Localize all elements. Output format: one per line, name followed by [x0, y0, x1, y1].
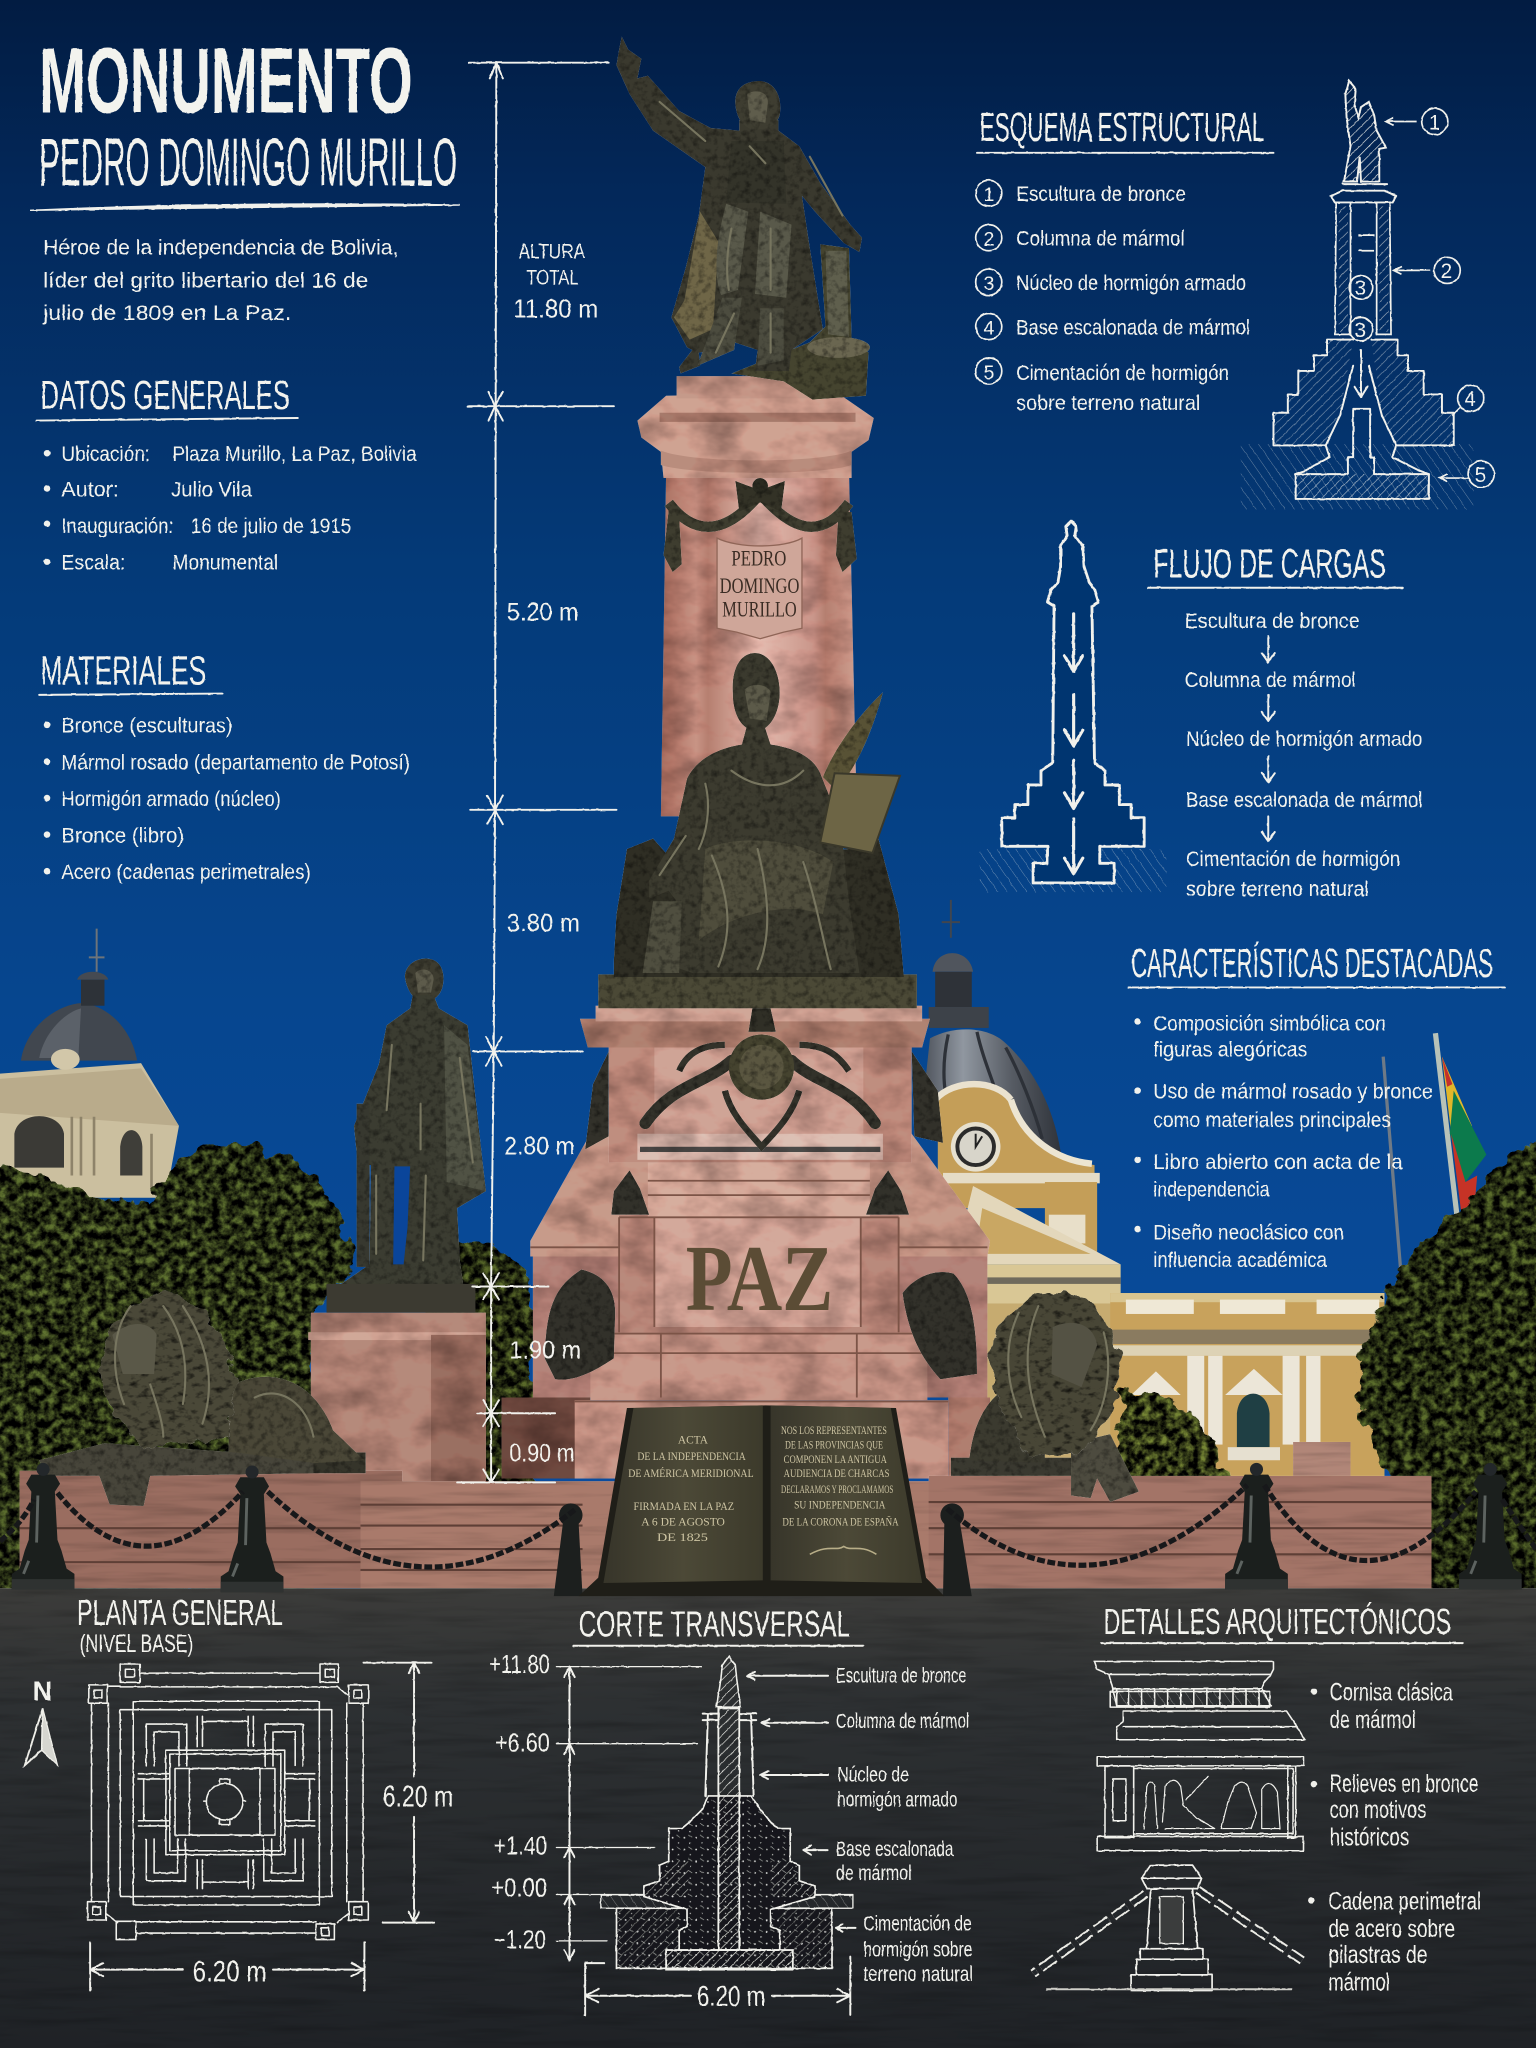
diagram: cross section: [601, 1656, 853, 1970]
open stone book: DE AMÉRICA MERIDIONAL: [628, 1466, 754, 1480]
plaza paving: [0, 1588, 1536, 2048]
left statue plinth top: [327, 1284, 475, 1313]
monument: pedestal block: [580, 1006, 930, 1162]
detail captions: con motivos: [1330, 1797, 1426, 1824]
detail captions: mármol: [1328, 1970, 1390, 1997]
diagram: load flow silhouette: [980, 521, 1166, 892]
dimension labels: 3.80 m: [507, 910, 580, 937]
title block: [30, 28, 460, 210]
open stone book: DE LA INDEPENDENCIA: [637, 1450, 746, 1463]
panel: materiales: MATERIALES: [40, 647, 206, 693]
dimension labels: 2.80 m: [504, 1134, 575, 1161]
bronze open tablet held by figure: [820, 773, 900, 853]
panel: flujo de cargas: Base escalonada de mármol: [1186, 787, 1422, 812]
panel: caracteristicas destacadas: independencia: [1153, 1176, 1270, 1201]
section labels and arrows: hormigón sobre: [863, 1939, 972, 1962]
open stone book: A 6 DE AGOSTO: [641, 1516, 725, 1529]
panel: planta general heading: (NIVEL BASE): [80, 1631, 193, 1658]
panel: flujo de cargas: Cimentación de hormigón: [1186, 846, 1400, 871]
dimension labels: 11.80 m: [513, 293, 598, 323]
panel: materiales: Bronce (libro): [61, 822, 184, 847]
panel: caracteristicas destacadas: Uso de mármol rosado y bronce: [1153, 1078, 1433, 1103]
monument: lower base: [502, 1134, 990, 1479]
open stone book: COMPONEN LA ANTIGUA: [784, 1453, 887, 1466]
level marks: +11.80: [489, 1649, 550, 1679]
panel: caracteristicas destacadas: Diseño neoclásico con: [1153, 1220, 1344, 1245]
panel: datos generales: Plaza Murillo, La Paz, Bolivia: [172, 441, 417, 466]
stairs and lion platforms: [20, 1442, 1432, 1591]
panel: flujo de cargas: FLUJO DE CARGAS: [1153, 540, 1386, 586]
panel: datos generales: Inauguración:: [61, 513, 174, 538]
thin flag pole: [1383, 1057, 1403, 1296]
detail captions: Cornisa clásica: [1330, 1680, 1453, 1707]
panel: caracteristicas destacadas: Libro abierto con acta de la: [1153, 1149, 1403, 1174]
panel: caracteristicas destacadas: Composición simbólica con: [1153, 1011, 1386, 1036]
open stone book: SU INDEPENDENCIA: [794, 1499, 886, 1512]
left tower building: [0, 929, 179, 1198]
panel: esquema estructural legend: Escultura de bronce: [1016, 181, 1186, 206]
diagram: structural elevation: 4: [1464, 388, 1476, 411]
panel: esquema estructural legend: Cimentación de hormigón: [1016, 360, 1229, 385]
detail captions: de acero sobre: [1328, 1916, 1455, 1943]
title block: MONUMENTO: [39, 28, 413, 132]
panel: esquema estructural legend: Núcleo de hormigón armado: [1016, 270, 1246, 295]
panel: esquema estructural legend: Base escalonada de mármol: [1016, 314, 1250, 339]
icon: north arrow: [25, 1676, 57, 1765]
intro text: Héroe de la independencia de Bolivia,: [43, 235, 398, 260]
left lion: [39, 1293, 366, 1506]
panel: esquema estructural legend: [976, 104, 1273, 415]
panel: esquema estructural legend: 2: [984, 229, 994, 251]
main facade with columns: [1110, 1293, 1384, 1479]
section labels and arrows: de mármol: [836, 1862, 912, 1885]
diagram: structural elevation: 1: [1429, 111, 1441, 134]
open stone book: NOS LOS REPRESENTANTES: [781, 1424, 887, 1437]
diagram: floor plan: [88, 1664, 368, 1940]
column capital: [637, 376, 874, 478]
open stone book: [579, 1405, 944, 1596]
panel: flujo de cargas: Escultura de bronce: [1185, 608, 1360, 633]
panel: datos generales: Julio Vila: [171, 476, 252, 501]
section width dimension: [585, 1957, 850, 2015]
panel: esquema estructural legend: ESQUEMA ESTRUCTURAL: [980, 104, 1264, 150]
panel: datos generales: [37, 372, 417, 574]
panel: esquema estructural legend: 1: [984, 184, 994, 206]
bronze garland: [664, 478, 857, 572]
height dimension line with tick marks and arrows: [457, 63, 616, 1482]
name plaque on column: PEDRO: [731, 546, 786, 571]
panel: caracteristicas destacadas: [1128, 940, 1505, 1272]
dimension labels: 0.90 m: [509, 1441, 575, 1468]
diagram: structural elevation: 3: [1354, 277, 1366, 300]
name plaque on column: MURILLO: [722, 596, 797, 621]
section labels and arrows: Columna de mármol: [836, 1710, 969, 1733]
panel: flujo de cargas: sobre terreno natural: [1186, 876, 1369, 901]
bronze cartouche: [645, 995, 875, 1147]
panel: caracteristicas destacadas: como materiales principales: [1153, 1107, 1391, 1132]
panel: esquema estructural legend: 3: [984, 273, 995, 295]
section labels and arrows: Base escalonada: [836, 1838, 954, 1861]
detail captions: pilastras de: [1328, 1942, 1428, 1969]
icon: north arrow: N: [33, 1676, 52, 1707]
panel: flujo de cargas: Columna de mármol: [1185, 667, 1356, 692]
detail captions: [1308, 1680, 1481, 1997]
panel: datos generales: Escala:: [61, 549, 125, 574]
panel: datos generales: 16 de julio de 1915: [191, 513, 351, 538]
detail captions: de mármol: [1330, 1707, 1416, 1734]
detail: chained pilaster: [1033, 1865, 1302, 1991]
diagram: structural elevation: 2: [1441, 260, 1452, 283]
intro text: [42, 235, 398, 325]
left statue: [336, 959, 486, 1288]
panel: datos generales: Ubicación:: [61, 441, 150, 466]
dimension labels: 1.90 m: [509, 1337, 581, 1364]
dimension labels: [504, 239, 598, 1468]
panel: esquema estructural legend: 5: [984, 362, 995, 384]
PAZ inscription: PAZ: [686, 1227, 833, 1331]
diagram: structural elevation: 3: [1354, 319, 1366, 342]
name plaque on column: DOMINGO: [720, 573, 799, 598]
panel: materiales: Bronce (esculturas): [61, 713, 232, 738]
trees right: [1110, 1123, 1536, 1600]
section labels and arrows: hormigón armado: [837, 1788, 957, 1811]
level marks: +1.40: [494, 1831, 547, 1861]
panel: esquema estructural legend: 4: [984, 317, 995, 339]
open stone book: DECLARAMOS Y PROCLAMAMOS: [781, 1483, 893, 1496]
panel: materiales: Acero (cadenas perimetrales): [61, 859, 311, 884]
perimeter chains: [0, 1485, 1536, 1567]
panel: planta general heading: [77, 1592, 283, 1658]
monument mouldings: [530, 1181, 987, 1401]
intro text: julio de 1809 en La Paz.: [42, 300, 291, 325]
level marks: +6.60: [495, 1728, 550, 1758]
panel: caracteristicas destacadas: figuras alegóricas: [1153, 1037, 1307, 1062]
right dome and clock tower: [921, 900, 1123, 1479]
panel: datos generales: DATOS GENERALES: [40, 372, 290, 418]
panel: materiales: Hormigón armado (núcleo): [61, 786, 281, 811]
panel: datos generales: Autor:: [61, 476, 119, 501]
Bolivian flag: [1435, 1033, 1486, 1243]
plan dimensions: 6.20 m: [193, 1955, 266, 1988]
section width dimension: 6.20 m: [697, 1981, 765, 2013]
panel: planta general heading: PLANTA GENERAL: [77, 1592, 283, 1633]
panel: flujo de cargas: Núcleo de hormigón armado: [1186, 726, 1422, 751]
column shaft: [661, 470, 857, 816]
stair lines: [20, 1502, 1432, 1570]
dimension labels: ALTURA: [519, 239, 586, 264]
right lion: [951, 1292, 1139, 1502]
detail captions: Relieves en bronce: [1330, 1771, 1479, 1798]
section labels and arrows: Cimentación de: [863, 1912, 972, 1935]
open stone book: DE 1825: [657, 1531, 708, 1544]
open stone book: FIRMADA EN LA PAZ: [633, 1500, 734, 1513]
section labels and arrows: Escultura de bronce: [836, 1664, 967, 1687]
plan dimensions: [90, 1663, 453, 1991]
panel: caracteristicas destacadas: influencia académica: [1153, 1247, 1327, 1272]
background: night-blue sky: [0, 0, 1536, 1620]
left statue pedestal: [308, 1313, 486, 1482]
section labels and arrows: [747, 1664, 973, 1986]
panel: flujo de cargas: [1148, 540, 1422, 901]
open stone book: DE LA CORONA DE ESPAÑA: [782, 1515, 899, 1529]
panel: esquema estructural legend: Columna de mármol: [1016, 226, 1185, 251]
dimension labels: TOTAL: [526, 265, 579, 290]
seated allegorical figure with book and palm: [598, 653, 917, 1008]
chalk annotation layer: PEDRO DOMINGO MURILLO: [39, 125, 457, 200]
chain posts: [12, 1463, 1522, 1596]
level marks: +0.00: [491, 1872, 547, 1902]
detail: bronze relief panel: [1097, 1757, 1304, 1851]
open stone book: AUDIENCIA DE CHARCAS: [784, 1467, 889, 1480]
name plaque on column: [717, 538, 802, 639]
open stone book: DE LAS PROVINCIAS QUE: [785, 1438, 883, 1451]
diagram: structural elevation: [1241, 81, 1494, 509]
intro text: líder del grito libertario del 16 de: [43, 267, 368, 292]
plan dimensions: 6.20 m: [383, 1780, 453, 1813]
panel: corte transversal heading: CORTE TRANSVERSAL: [579, 1604, 850, 1645]
level marks: −1.20: [494, 1925, 546, 1955]
diagram: structural elevation: 5: [1475, 464, 1486, 487]
section labels and arrows: terreno natural: [863, 1963, 973, 1986]
panel: materiales: Mármol rosado (departamento de Potosí): [61, 749, 410, 774]
bronze small caps and relief plaques: [545, 1051, 977, 1380]
panel: datos generales: Monumental: [172, 549, 278, 574]
trees left: [0, 1143, 536, 1593]
panel: esquema estructural legend: sobre terreno natural: [1016, 390, 1200, 415]
dimension labels: 5.20 m: [507, 599, 579, 626]
detail captions: Cadena perimetral: [1328, 1889, 1481, 1916]
detail captions: históricos: [1330, 1825, 1409, 1852]
open stone book: ACTA: [678, 1433, 708, 1446]
main statue of Murillo: [616, 37, 870, 400]
section labels and arrows: Núcleo de: [837, 1764, 909, 1787]
level marks: [489, 1649, 853, 1960]
panel: materiales: [39, 647, 410, 884]
detail: cornice: [1095, 1661, 1305, 1740]
